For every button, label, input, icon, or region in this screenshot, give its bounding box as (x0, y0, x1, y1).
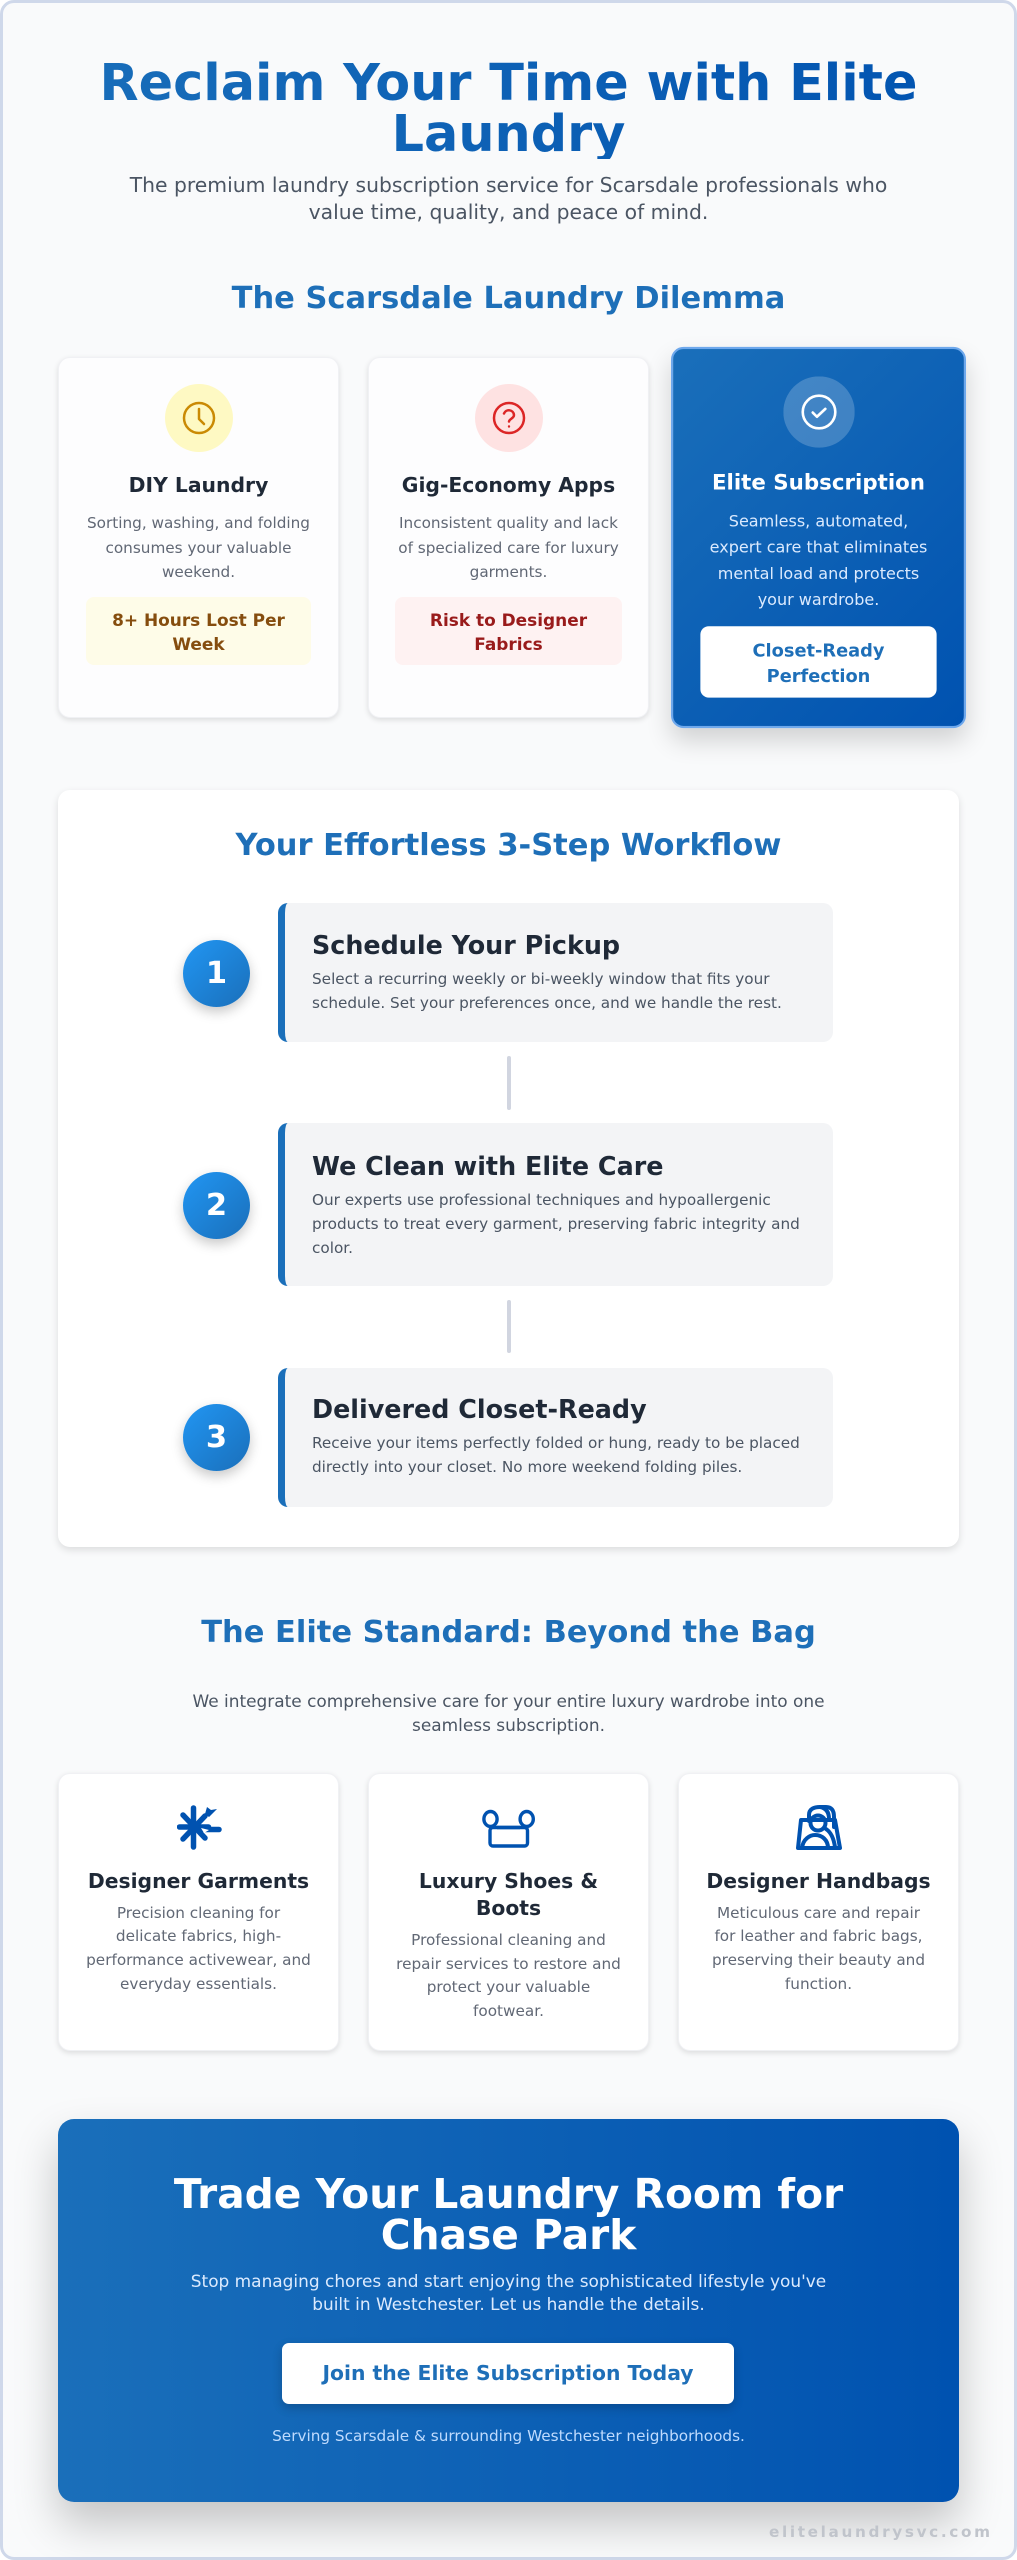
cta description: built in Westchester. Let us handle the details. (312, 2294, 705, 2314)
step 2 number (183, 1172, 250, 1238)
card description: consumes your valuable (105, 538, 292, 556)
tag: closet-ready (700, 626, 937, 698)
icon: check (784, 376, 854, 448)
cta button (282, 2343, 734, 2404)
card title: Luxury Shoes & (419, 1869, 598, 1893)
card description: Professional cleaning and (411, 1931, 606, 1949)
step 1 title: Schedule Your Pickup (312, 930, 620, 960)
card title: Designer Garments (88, 1869, 309, 1893)
intro text (192, 1691, 824, 1735)
subtitle: The premium laundry subscription service for Scarsdale professionals who (130, 173, 887, 197)
card description (710, 512, 927, 609)
card description: Seamless, automated, (729, 512, 908, 531)
icon: handbag (796, 1805, 842, 1850)
card description: delicate fabrics, high- (116, 1927, 281, 1945)
card title: Designer Handbags (706, 1869, 931, 1893)
tag: closet-ready: Perfection (767, 665, 870, 686)
step 3 description: Receive your items perfectly folded or hung, ready to be placed (312, 1434, 800, 1452)
card description: protect your valuable (427, 1978, 590, 1996)
step 1 description: schedule. Set your preferences once, and we handle the rest. (312, 994, 782, 1012)
card description (398, 514, 619, 581)
cta note: Serving Scarsdale & surrounding Westchester neighborhoods. (272, 2427, 745, 2445)
card description (396, 1931, 621, 2020)
card description: Precision cleaning for (117, 1904, 280, 1922)
watermark: elitelaundrysvc.com (769, 2523, 993, 2541)
title: Laundry (392, 104, 625, 163)
card title: Elite Subscription (712, 470, 925, 495)
card description: expert care that eliminates (710, 538, 927, 557)
cta button: Join the Elite Subscription Today (322, 2361, 694, 2385)
cta description: Stop managing chores and start enjoying the sophisticated lifestyle you've (191, 2270, 826, 2290)
card description: Meticulous care and repair (717, 1904, 920, 1922)
icon: shoes (482, 1810, 535, 1848)
step 2 description: Our experts use professional techniques and hypoallergenic (312, 1191, 771, 1209)
step 1 number (183, 940, 250, 1006)
card description: preserving their beauty and (712, 1951, 925, 1969)
step 1 number: 1 (206, 956, 227, 990)
icon: question (475, 384, 543, 452)
step 2 description: products to treat every garment, preserving fabric integrity and (312, 1215, 800, 1233)
step 2 title: We Clean with Elite Care (312, 1151, 663, 1181)
card description: for leather and fabric bags, (714, 1927, 923, 1945)
card title: DIY Laundry (129, 473, 268, 497)
card description: function. (785, 1975, 852, 1993)
panel: luxury shoes (368, 1773, 649, 2051)
step 3 number (183, 1404, 250, 1470)
step 1 description (312, 970, 782, 1012)
panel: designer garments (58, 1773, 339, 2051)
tag: risk: Fabrics (474, 634, 543, 654)
title (0, 57, 1017, 159)
card description: garments. (470, 563, 547, 581)
panel: gig-economy apps (368, 357, 649, 718)
step 3 description: directly into your closet. No more weekend folding piles. (312, 1458, 742, 1476)
step 3 description (312, 1434, 800, 1476)
card description: performance activewear, and (86, 1951, 311, 1969)
step 2 description: color. (312, 1239, 353, 1257)
card description: everyday essentials. (120, 1975, 277, 1993)
step 2 description (312, 1191, 800, 1257)
step 2 card (278, 1123, 833, 1286)
subtitle (130, 173, 887, 224)
card description: your wardrobe. (758, 591, 879, 609)
card description: Sorting, washing, and folding (87, 514, 310, 532)
card title: Gig-Economy Apps (402, 473, 615, 497)
card description: of specialized care for luxury (398, 538, 619, 556)
cta title (174, 2170, 844, 2259)
connector 1 (506, 1056, 510, 1110)
heading: elite standard: The Elite Standard: Beyond the Bag (201, 1615, 816, 1650)
card title: Boots (476, 1896, 541, 1920)
cta title: Chase Park (381, 2211, 636, 2259)
card description (86, 1904, 311, 1993)
step 3 number: 3 (206, 1420, 227, 1454)
panel: designer handbags (678, 1773, 959, 2051)
icon: garment (177, 1805, 222, 1850)
heading: workflow: Your Effortless 3-Step Workflow (236, 828, 781, 863)
step 3 card (278, 1368, 833, 1507)
intro text: We integrate comprehensive care for your entire luxury wardrobe into one (192, 1691, 824, 1711)
panel: call to action (58, 2119, 959, 2502)
card description: weekend. (162, 563, 235, 581)
card description: Inconsistent quality and lack (399, 514, 618, 532)
tag: closet-ready: Closet-Ready (752, 640, 884, 661)
cta title: Trade Your Laundry Room for (174, 2170, 843, 2218)
card description (712, 1904, 925, 1993)
card description (87, 514, 310, 581)
step 3 title: Delivered Closet-Ready (312, 1394, 647, 1424)
icon: clock (165, 384, 233, 452)
card description: mental load and protects (718, 564, 919, 583)
tag: risk: Risk to Designer (430, 610, 587, 630)
title: Reclaim Your Time with Elite (100, 53, 917, 112)
subtitle: value time, quality, and peace of mind. (309, 200, 708, 224)
connector 2 (506, 1300, 510, 1353)
tag: hours lost: 8+ Hours Lost Per (112, 610, 285, 630)
intro text: seamless subscription. (412, 1715, 605, 1735)
tag: risk (395, 597, 622, 665)
heading: dilemma: The Scarsdale Laundry Dilemma (232, 281, 785, 316)
panel: elite subscription (671, 347, 966, 728)
card description: footwear. (473, 2002, 544, 2020)
step 1 description: Select a recurring weekly or bi-weekly window that fits your (312, 970, 770, 988)
step 1 card (278, 903, 833, 1042)
panel: DIY laundry (58, 357, 339, 718)
cta description (191, 2270, 826, 2314)
card title (419, 1869, 598, 1920)
tag: hours lost (86, 597, 311, 665)
step 2 number: 2 (206, 1188, 227, 1222)
tag: hours lost: Week (172, 634, 225, 654)
card description: repair services to restore and (396, 1955, 621, 1973)
panel: workflow (58, 790, 959, 1547)
